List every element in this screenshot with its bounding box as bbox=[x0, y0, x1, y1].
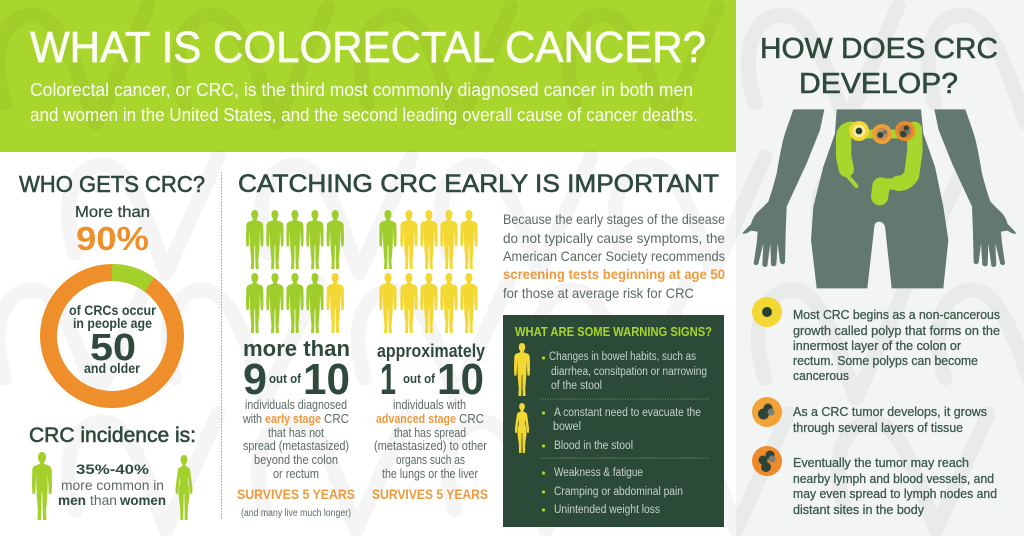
illustration: body with colon bbox=[742, 109, 1016, 288]
text block: screening recommendation: Because the early stages of the disease bbox=[503, 211, 725, 227]
header description bbox=[30, 79, 698, 125]
incidence text: men bbox=[58, 493, 86, 508]
donut chart: 90 percent bbox=[48, 272, 176, 400]
donut label: and older bbox=[84, 361, 141, 376]
polyp ring bbox=[849, 121, 869, 141]
heading: how does CRC develop bbox=[760, 33, 998, 100]
heading: CRC incidence: CRC incidence is: bbox=[29, 424, 196, 447]
text: spread: may even spread to lymph nodes and bbox=[793, 487, 997, 501]
panel: warning signs bbox=[503, 315, 724, 527]
text: spread: nearby lymph and blood vessels, and bbox=[793, 472, 994, 486]
icon: spreading tumor bbox=[752, 446, 782, 476]
stat block: early stage: more than bbox=[243, 336, 350, 361]
stat block: advanced stage: advanced stage bbox=[376, 412, 456, 426]
stat block: early stage: out of bbox=[269, 372, 302, 386]
panel: header bbox=[0, 0, 736, 152]
stat block: early stage: SURVIVES 5 YEARS bbox=[237, 486, 355, 502]
text: polyp: cancerous bbox=[793, 369, 849, 383]
stat block: early stage: with bbox=[242, 412, 262, 426]
heading: warning signs: WHAT ARE SOME WARNING SIGNS? bbox=[515, 325, 712, 339]
tumor ring bbox=[872, 124, 892, 144]
icon: female figure bbox=[515, 403, 529, 453]
incidence text bbox=[58, 461, 166, 508]
text block: screening recommendation: do not typically cause symptoms, the bbox=[503, 230, 725, 246]
spreading tumor ring bbox=[895, 121, 915, 141]
stat: 90%: 90% bbox=[76, 220, 149, 257]
stat block: early stage: CRC bbox=[324, 412, 349, 426]
stat block: early stage: 9 bbox=[243, 355, 267, 404]
left arm bbox=[742, 109, 824, 267]
text block: screening recommendation: screening tests beginning at age 50 bbox=[503, 266, 725, 282]
warning sign list: Changes in bowel habits, such as bbox=[549, 351, 696, 363]
header description: Colorectal cancer, or CRC, is the third most commonly diagnosed cancer in both men bbox=[30, 79, 693, 100]
stat block: advanced stage: CRC bbox=[459, 412, 484, 426]
text: spread: distant sites in the body bbox=[793, 503, 925, 517]
legend: spread bbox=[752, 446, 997, 517]
legend: tumor bbox=[752, 397, 987, 435]
text block: screening recommendation bbox=[503, 211, 725, 301]
text: tumor: through several layers of tissue bbox=[793, 421, 963, 435]
stat block: advanced stage: approximately bbox=[377, 340, 486, 361]
stat block: early stage: (and many live much longer) bbox=[241, 508, 351, 519]
text: more than: More than bbox=[75, 204, 150, 221]
heading: how does CRC develop: HOW DOES CRC bbox=[760, 33, 998, 65]
stat block: early stage: individuals diagnosed bbox=[245, 398, 347, 412]
header description: and women in the United States, and the second leading overall cause of cancer deaths. bbox=[30, 104, 698, 125]
text block: screening recommendation: for those at average risk for CRC bbox=[503, 285, 694, 301]
icon: female figure bbox=[175, 455, 193, 520]
title: WHAT IS COLORECTAL CANCER? bbox=[30, 23, 706, 72]
text: tumor: As a CRC tumor develops, it grows bbox=[793, 405, 987, 419]
incidence text: than bbox=[90, 493, 117, 508]
stat block: advanced stage: out of bbox=[403, 372, 436, 386]
pictogram: 1 out of 10 bbox=[379, 210, 478, 333]
stat block: advanced stage: 1 bbox=[380, 355, 396, 404]
stat block: advanced stage: organs such as bbox=[396, 453, 465, 467]
right arm bbox=[934, 109, 1016, 267]
warning sign list: of the stool bbox=[551, 380, 602, 392]
incidence text: 35%-40% bbox=[76, 461, 150, 477]
icon: polyp bbox=[752, 297, 782, 327]
icon: tumor bbox=[752, 397, 782, 427]
donut label: of CRCs occur bbox=[69, 303, 157, 318]
text: polyp: rectum. Some polyps can become bbox=[793, 354, 978, 368]
stat block: early stage: spread (metastasized) bbox=[243, 439, 349, 453]
torso bbox=[811, 109, 948, 288]
stat block: early stage: or rectum bbox=[273, 467, 319, 481]
stat block: advanced stage bbox=[372, 340, 488, 502]
stat block: advanced stage: that has spread bbox=[394, 426, 466, 440]
stat block: advanced stage: SURVIVES 5 YEARS bbox=[372, 486, 488, 502]
warning sign list: Blood in the stool bbox=[554, 440, 633, 452]
icon: male figure bbox=[32, 452, 52, 520]
stat block: early stage: beyond the colon bbox=[254, 453, 338, 467]
donut label: in people age bbox=[73, 316, 152, 331]
bullets bbox=[542, 356, 545, 512]
stat block: early stage: 10 bbox=[303, 355, 350, 404]
warning sign list: Unintended weight loss bbox=[554, 504, 660, 516]
incidence text: more common in bbox=[61, 477, 164, 493]
donut label bbox=[69, 303, 157, 376]
icon: male figure bbox=[514, 343, 530, 396]
warning sign list: Weakness & fatigue bbox=[554, 467, 643, 479]
text block: screening recommendation: American Cancer Society recommends bbox=[503, 248, 725, 264]
warning sign list: Cramping or abdominal pain bbox=[554, 486, 683, 498]
legend: polyp bbox=[752, 297, 1000, 383]
stat block: early stage: early stage bbox=[265, 412, 321, 426]
text: tumor bbox=[793, 405, 987, 435]
pictogram: 9 out of 10 bbox=[246, 210, 344, 333]
text: spread: Eventually the tumor may reach bbox=[793, 456, 969, 470]
incidence text: women bbox=[119, 493, 166, 508]
stat block: advanced stage: 10 bbox=[437, 355, 484, 404]
panel: how CRC develops background bbox=[736, 0, 1024, 536]
colon bbox=[844, 129, 915, 197]
text: spread bbox=[793, 456, 997, 517]
stat block: advanced stage: the lungs or the liver bbox=[382, 467, 478, 481]
stat block: advanced stage: (metastasized) to other bbox=[374, 439, 487, 453]
heading: how does CRC develop: DEVELOP? bbox=[799, 68, 958, 100]
heading: catching CRC early: CATCHING CRC EARLY IS IMPORTANT bbox=[238, 170, 719, 198]
text: polyp: growth called polyp that forms on the bbox=[793, 324, 1000, 338]
stat block: early stage bbox=[237, 336, 355, 519]
stat block: advanced stage: individuals with bbox=[393, 398, 466, 412]
stat block: early stage: that has not bbox=[268, 426, 324, 440]
warning sign list: diarrhea, consitpation or narrowing bbox=[551, 366, 707, 378]
donut label: 50 bbox=[90, 327, 136, 369]
text: polyp: innermost layer of the colon or bbox=[793, 339, 961, 353]
warning sign list: A constant need to evacuate the bbox=[554, 407, 701, 419]
heading: who gets CRC: WHO GETS CRC? bbox=[19, 171, 205, 197]
warning sign list: bowel bbox=[553, 421, 581, 433]
text: polyp: Most CRC begins as a non-cancerous bbox=[793, 308, 1000, 322]
text: polyp bbox=[793, 308, 1000, 383]
panel: who gets CRC bbox=[19, 171, 205, 520]
warning sign list bbox=[549, 351, 707, 516]
